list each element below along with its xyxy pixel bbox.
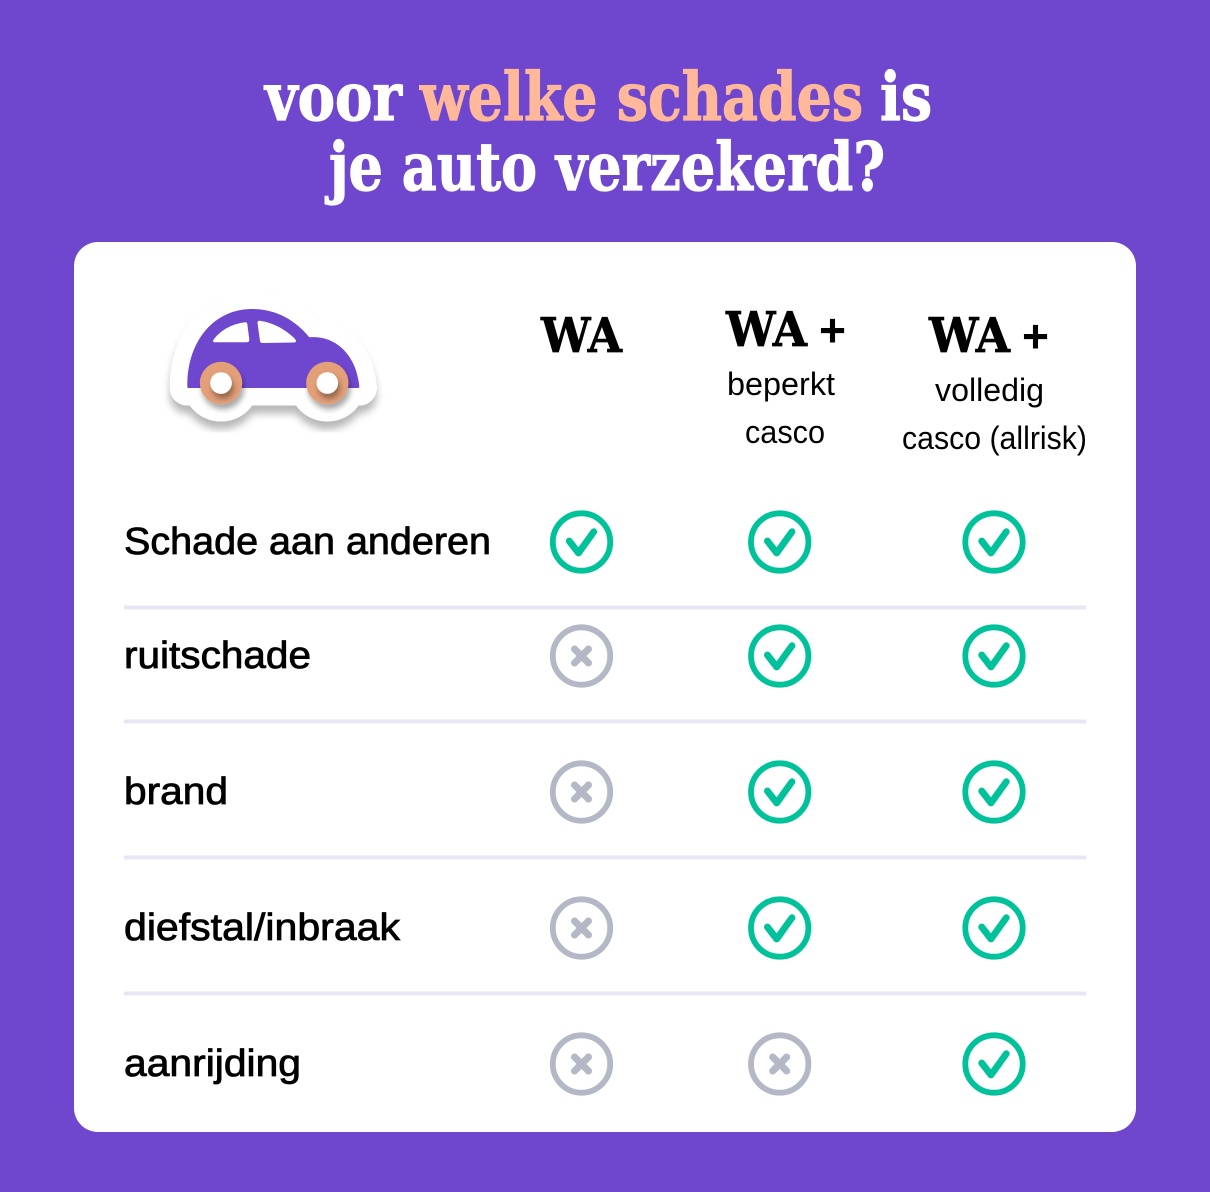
column heading: WA + beperkt casco: + bbox=[819, 304, 846, 356]
title: is bbox=[880, 58, 932, 136]
column heading: WA + volledig casco: + bbox=[1022, 310, 1049, 362]
column heading: WA + volledig casco bbox=[902, 308, 1087, 456]
row: aanrijding: aanrijding bbox=[124, 1043, 301, 1085]
panel: comparison table bbox=[74, 242, 1136, 1132]
row: ruitschade: ruitschade bbox=[124, 635, 311, 677]
row: diefstal/inbraak bbox=[124, 899, 1023, 957]
row: Schade aan anderen: Schade aan anderen bbox=[124, 521, 491, 563]
title: je auto verzekerd? bbox=[325, 128, 885, 206]
title: voor bbox=[263, 58, 403, 136]
icon: car bbox=[187, 309, 359, 404]
column heading: WA + beperkt casco bbox=[725, 302, 846, 450]
row: Schade aan anderen bbox=[124, 513, 1023, 571]
column heading: WA: WA bbox=[540, 308, 623, 364]
title: welke schades bbox=[419, 58, 863, 136]
column heading: WA + volledig casco: WA bbox=[928, 308, 1011, 364]
row: brand: brand bbox=[124, 771, 228, 813]
column heading: WA + beperkt casco: casco bbox=[745, 414, 825, 450]
row: aanrijding bbox=[124, 1035, 1023, 1093]
column heading: WA + beperkt casco: beperkt bbox=[727, 366, 835, 402]
title bbox=[263, 58, 932, 206]
row: ruitschade bbox=[124, 627, 1023, 685]
column heading: WA + volledig casco: casco (allrisk) bbox=[902, 420, 1087, 456]
row: diefstal/inbraak: diefstal/inbraak bbox=[124, 907, 401, 949]
column heading: WA + volledig casco: volledig bbox=[935, 372, 1044, 408]
column heading: WA + beperkt casco: WA bbox=[725, 302, 808, 358]
row: brand bbox=[124, 763, 1023, 821]
